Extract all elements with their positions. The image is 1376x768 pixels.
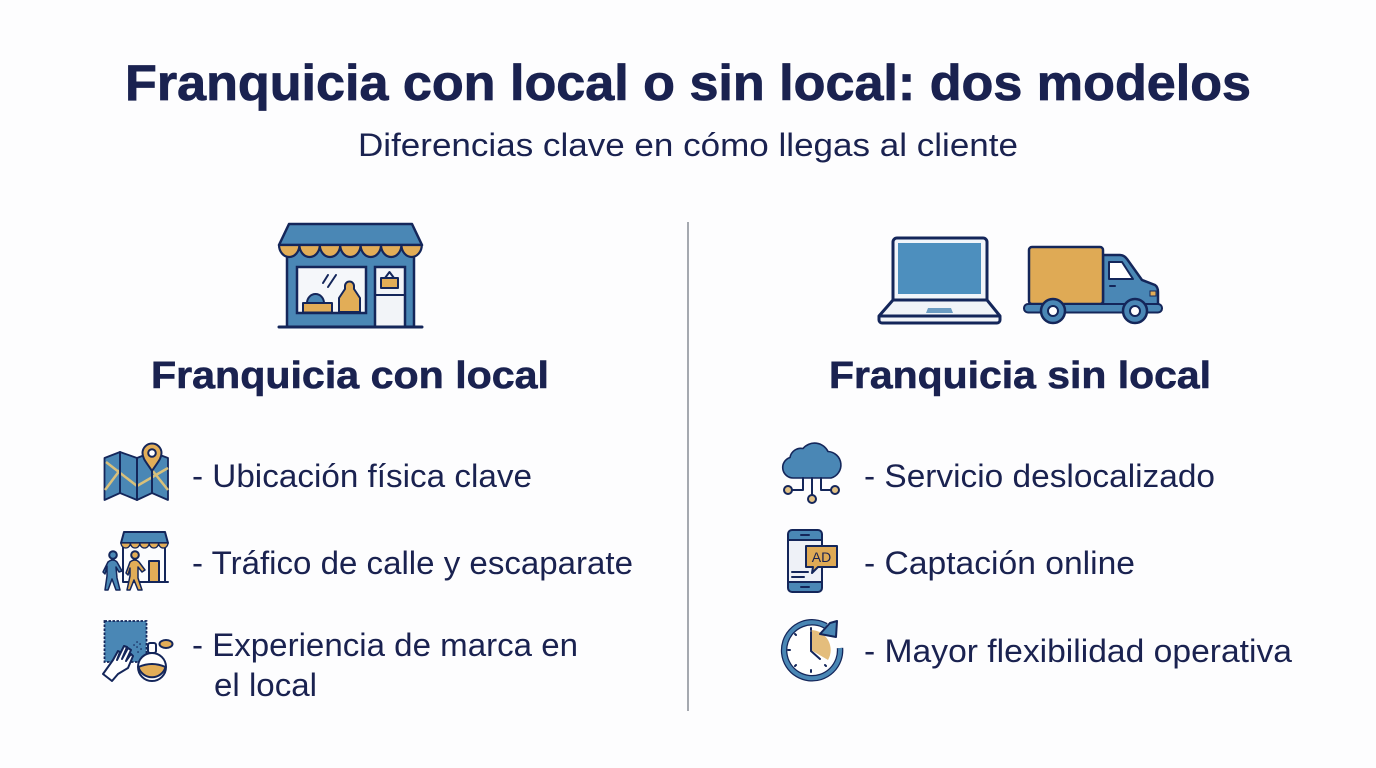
panel: franquicia sin local [783, 238, 1292, 678]
icon: clock with arrow [784, 621, 840, 678]
center divider [687, 222, 689, 711]
text: flexibilidad: - Mayor flexibilidad operativa [864, 633, 1292, 669]
icon: map with pin [104, 444, 168, 500]
heading: franquicia con local: Franquicia con local [151, 355, 549, 397]
icon: texture and perfume [103, 621, 172, 681]
icon: phone with ad [788, 530, 837, 592]
icon: phone with ad: AD [812, 549, 831, 565]
text: servicio: - Servicio deslocalizado [864, 458, 1215, 494]
text: ubicación: - Ubicación física clave [192, 458, 532, 494]
text: tráfico: - Tráfico de calle y escaparate [192, 545, 633, 581]
title: Franquicia con local o sin local: dos modelos [125, 55, 1251, 111]
icon: storefront [279, 224, 422, 327]
icon: delivery truck [1024, 247, 1162, 323]
panel: franquicia con local [103, 224, 633, 703]
icon: street traffic [103, 532, 168, 590]
text: experiencia: - Experiencia de marca en [192, 627, 578, 663]
text: experiencia: el local [214, 667, 317, 703]
text: experiencia [192, 627, 578, 703]
text: captación: - Captación online [864, 545, 1135, 581]
subtitle: Diferencias clave en cómo llegas al cliente [358, 127, 1018, 163]
icon: cloud network [783, 443, 841, 503]
icon: laptop [879, 238, 1000, 323]
heading: franquicia sin local: Franquicia sin local [829, 355, 1211, 397]
